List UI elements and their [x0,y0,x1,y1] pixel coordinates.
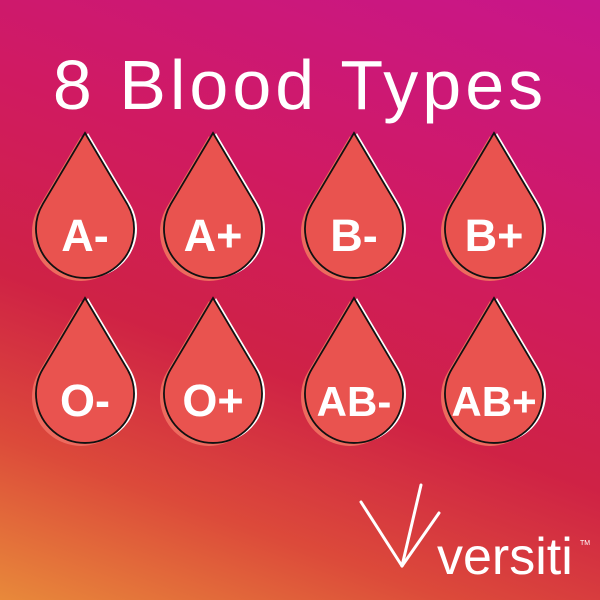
drop: A+: A+ [184,210,242,261]
logo: versiti [361,485,590,586]
drop: AB+ [441,298,546,446]
title: 8 Blood Types [53,46,547,124]
drop: O- [32,298,137,446]
drop: A+ [160,133,265,281]
drop: B+: B+ [465,210,523,261]
drop: A- [32,133,137,281]
drop: B- [301,133,406,281]
logo: versiti: TM [580,540,590,547]
drop: O-: O- [60,375,110,426]
drop: A-: A- [61,210,109,261]
brand name: versiti [437,528,573,586]
drop: AB- [301,298,406,446]
drop: AB-: AB- [317,378,391,425]
drop: AB+: AB+ [451,378,537,425]
drop: O+ [160,298,265,446]
icon: V mark [361,485,439,566]
drops grid [32,133,546,446]
drop: B+ [441,133,546,281]
drop: B-: B- [330,210,378,261]
drop: O+: O+ [182,375,244,426]
